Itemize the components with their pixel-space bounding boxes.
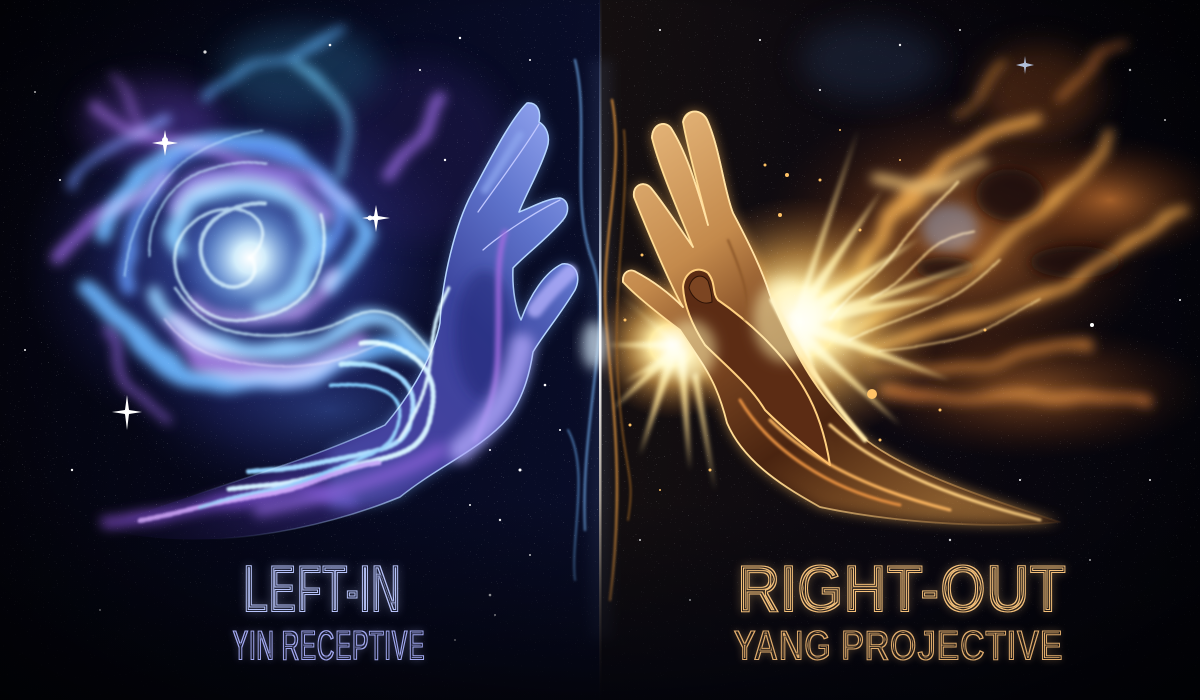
label: right subheading: YANG PROJECTIVE <box>733 622 1063 670</box>
dark dust clumps <box>915 169 1120 279</box>
background: left cosmic half <box>0 0 601 700</box>
palm shading <box>455 270 515 400</box>
lavender thumb-base and finger highlights <box>260 124 570 510</box>
label: right heading: RIGHT-OUT <box>737 551 1066 627</box>
hand body <box>100 103 578 539</box>
thin swirl filaments <box>125 130 445 375</box>
panel: left galaxy swirl <box>20 25 530 525</box>
swirl centre glow <box>180 188 320 328</box>
orange nebula clouds <box>760 20 1200 460</box>
hand body <box>623 112 1060 525</box>
nebula glow <box>20 25 530 505</box>
label: left subheading: YIN RECEPTIVE <box>232 622 425 670</box>
burst glow right <box>660 197 940 447</box>
left receptive hand <box>100 103 578 539</box>
bottom fade <box>0 500 1200 700</box>
background: right cosmic half <box>600 0 1200 700</box>
label: left heading: LEFT-IN <box>243 551 401 627</box>
hand glow <box>330 103 578 510</box>
wide blue swirl arms <box>75 30 470 395</box>
icon: divider energy line <box>568 0 631 700</box>
finger edge light <box>623 112 770 307</box>
energy streams through hand <box>140 290 450 520</box>
palm edge flare <box>753 278 817 362</box>
sparks <box>624 129 986 491</box>
hand glow <box>623 112 1060 525</box>
fire burst behind hand <box>592 130 985 490</box>
golden filaments <box>830 180 1040 350</box>
right projective hand <box>623 112 1060 525</box>
panel: right fire nebula <box>760 20 1200 460</box>
thumb <box>683 270 830 465</box>
thumb nail <box>689 276 712 303</box>
icon: sparkle stars <box>112 56 1034 430</box>
palm glow streaks <box>728 240 1040 520</box>
burst rays <box>606 130 985 490</box>
finger base flare <box>664 320 716 380</box>
burst glow left <box>592 271 752 419</box>
wide purple nebula bands <box>60 75 445 525</box>
golden flowing wisps <box>820 40 1190 400</box>
